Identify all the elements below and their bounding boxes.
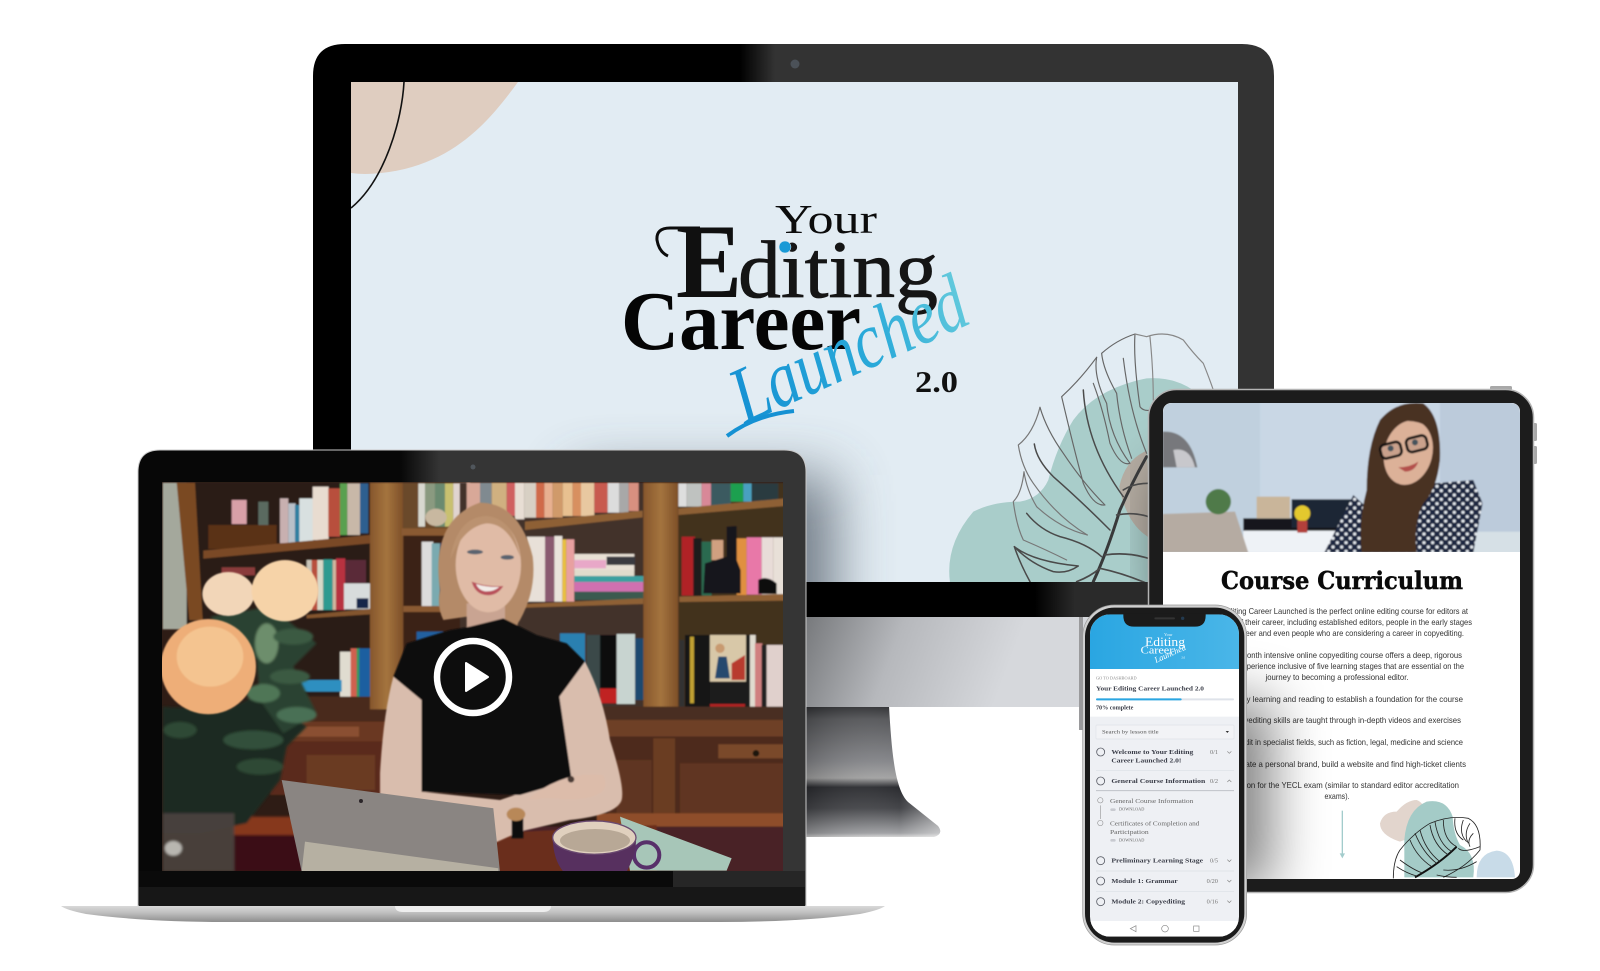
icon: play button	[437, 641, 509, 713]
curriculum description text: learning experience inclusive of five learning stages that are essential on the	[1210, 661, 1464, 671]
expanded lesson items: DOWNLOAD	[1119, 838, 1145, 842]
course progress panel: 70% complete	[1096, 705, 1134, 711]
curriculum list: 0/20	[1207, 878, 1218, 885]
curriculum list: 0/1	[1210, 749, 1218, 756]
expanded lesson items: DOWNLOAD	[1119, 808, 1145, 812]
curriculum description text: Preparation for the YECL exam (similar to standard editor accreditation	[1215, 780, 1459, 790]
mint book and purple coffee cup	[553, 817, 732, 872]
search by lesson title dropdown: Search by lesson title	[1102, 729, 1159, 735]
curriculum list: Career Launched 2.0!	[1111, 758, 1181, 765]
watch	[512, 818, 523, 838]
flowers in a vase	[161, 560, 318, 872]
shadow from tablet	[1130, 452, 1148, 582]
black top	[393, 618, 585, 795]
skin arms	[380, 662, 622, 845]
android nav bar	[1090, 921, 1239, 937]
glasses	[1379, 434, 1429, 459]
expanded lesson items: General Course Information	[1110, 798, 1193, 805]
tablet body	[1148, 390, 1534, 892]
instructor portrait	[380, 503, 622, 845]
crossed hand	[542, 776, 569, 789]
laptop	[61, 450, 885, 922]
logo: Your Editing Career Launched 2.0: 2.0	[915, 364, 958, 399]
phone frame	[1083, 605, 1247, 945]
curriculum list: 0/2	[1210, 778, 1218, 785]
curriculum description text	[1202, 606, 1472, 801]
blue header with logo	[1090, 614, 1239, 669]
expanded lesson items: Participation	[1110, 830, 1149, 836]
logo: Your Editing Career Launched 2.0: Launched	[716, 258, 981, 441]
blue header with logo: Your	[1164, 632, 1173, 637]
blue header with logo: Editing	[1145, 635, 1186, 649]
monstera leaf outline	[1013, 334, 1213, 583]
bookshelves right section	[460, 483, 785, 872]
curriculum description text: Learn to edit in specialist fields, such as fiction, legal, medicine and science	[1211, 737, 1463, 747]
expanded lesson items	[1098, 798, 1199, 842]
laptop screen: video still of instructor in a library	[161, 482, 785, 872]
hair	[438, 503, 537, 640]
curriculum description text: This six-month intensive online copyediting course offers a deep, rigorous	[1212, 650, 1462, 660]
face	[1382, 420, 1434, 486]
silver tablet prop on desk	[282, 780, 500, 872]
curriculum description text: any stage of their career, including established editors, people in the early stages	[1202, 617, 1472, 627]
logo: Your Editing Career Launched 2.0	[621, 196, 981, 441]
heading: Course Curriculum: Course Curriculum	[1221, 566, 1463, 595]
curriculum list: General Course Information	[1111, 778, 1206, 785]
face	[456, 518, 521, 612]
woman hair	[1361, 403, 1440, 553]
curriculum list: Module 2: Copyediting	[1111, 899, 1186, 906]
decorative peach blob	[351, 82, 518, 174]
logo: Your Editing Career Launched 2.0: E	[676, 203, 742, 320]
course progress panel: Your Editing Career Launched 2.0	[1096, 686, 1205, 693]
curriculum list: Module 1: Grammar	[1111, 878, 1178, 885]
shadow cast by phone on tablet	[1247, 664, 1310, 879]
course progress panel	[1090, 669, 1239, 717]
monitor	[313, 44, 1274, 837]
expanded lesson items: Certificates of Completion and	[1110, 821, 1199, 828]
phone notch with speaker and camera	[1123, 614, 1206, 627]
phone screen	[1090, 614, 1239, 937]
curriculum list	[1096, 748, 1234, 906]
blue header with logo: Career	[1141, 646, 1174, 657]
curriculum description text: Preliminary learning and reading to establish a foundation for the course	[1211, 694, 1463, 704]
laptop lid bezel	[138, 450, 806, 906]
decorative blobs and monstera leaf	[1380, 800, 1515, 878]
monitor screen	[351, 82, 1238, 582]
curriculum list: Preliminary Learning Stage	[1111, 858, 1203, 865]
tablet hero photo: smiling woman with glasses at a desk	[1160, 400, 1523, 553]
lamp	[1163, 432, 1197, 467]
polka dot blazer	[1324, 480, 1483, 553]
curriculum description text: of their career and even people who are considering a career in copyediting.	[1210, 628, 1464, 638]
logo: Your Editing Career Launched 2.0: Your	[775, 196, 877, 242]
monitor bezel	[313, 44, 1274, 617]
thin black curve	[351, 82, 404, 208]
arrow pointing down	[1340, 811, 1345, 858]
curriculum list: 0/16	[1207, 899, 1218, 906]
curriculum description text: Core copyediting skills are taught through in-depth videos and exercises	[1213, 715, 1461, 725]
laptop base	[61, 906, 885, 922]
tablet screen	[1160, 400, 1523, 879]
curriculum list: 0/5	[1210, 858, 1218, 865]
curriculum description text: journey to becoming a professional editor.	[1265, 672, 1408, 682]
search by lesson title dropdown	[1096, 725, 1234, 739]
blue header with logo: Launched	[1152, 642, 1188, 665]
neck	[465, 602, 506, 628]
course progress panel: GO TO DASHBOARD	[1096, 677, 1137, 681]
phone	[1083, 605, 1247, 945]
monitor stand	[780, 706, 940, 837]
curriculum description text: How to create a personal brand, build a website and find high-ticket clients	[1208, 759, 1466, 769]
logo: Your Editing Career Launched 2.0: diting	[738, 224, 938, 315]
chin edge strip behind phone	[1079, 617, 1083, 730]
desk items	[1243, 518, 1343, 531]
logo: Your Editing Career Launched 2.0: Career	[621, 275, 861, 368]
shadow from laptop	[575, 475, 835, 655]
curriculum description text: exams).	[1324, 791, 1350, 801]
blue header with logo: 2.0	[1181, 655, 1186, 659]
curriculum description text: Your Editing Career Launched is the perfect online editing course for editors at	[1206, 606, 1469, 616]
teal and beige blobs	[949, 378, 1191, 582]
curriculum list: Welcome to Your Editing	[1111, 749, 1194, 756]
tablet	[1148, 386, 1537, 892]
bookshelves left section	[163, 483, 473, 795]
monitor silver chin	[780, 617, 1100, 707]
tablet side buttons	[1490, 386, 1537, 464]
